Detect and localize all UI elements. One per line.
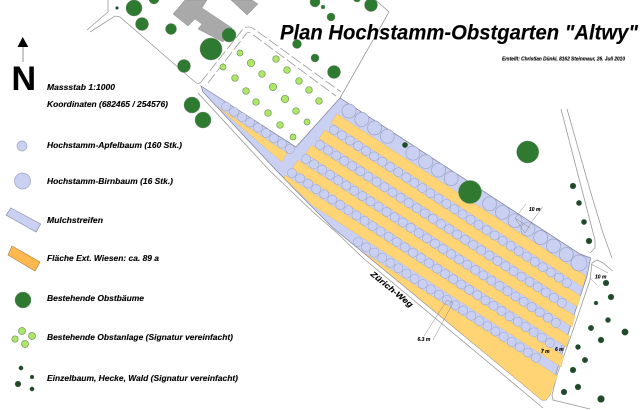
author credit: Erstellt: Christian Dünki, 8162 Steinmaur, 26. Juli 2010 xyxy=(502,56,625,62)
legend: existing fruit trees xyxy=(15,292,144,308)
legend: meadow area: Fläche Ext. Wiesen: ca. 89 a xyxy=(47,253,159,263)
legend: single tree, hedge, forest: Einzelbaum, Hecke, Wald (Signatur vereinfacht) xyxy=(47,373,238,383)
legend: single tree, hedge, forest xyxy=(15,366,238,391)
legend: mulch strip: Mulchstreifen xyxy=(47,215,103,225)
existing orchard xyxy=(220,50,322,140)
path label: Zürich-Weg xyxy=(368,269,415,309)
dimension lines and labels: 6 m xyxy=(555,347,564,353)
scale text: Massstab 1:1000 xyxy=(47,82,115,92)
legend: meadow area xyxy=(8,246,159,271)
legend: existing orchard xyxy=(12,328,233,348)
legend: existing fruit trees: Bestehende Obstbäume xyxy=(47,293,144,303)
mulch strip area xyxy=(201,86,591,400)
dimension lines and labels: 6.3 m xyxy=(418,337,431,343)
single trees, hedge, forest xyxy=(116,6,628,402)
dimension lines and labels: 7 m xyxy=(541,349,550,355)
existing fruit trees xyxy=(126,0,539,204)
dimension lines and labels xyxy=(418,204,608,355)
legend: existing orchard: Bestehende Obstanlage (Signatur vereinfacht) xyxy=(47,332,233,342)
legend: apple tree: Hochstamm-Apfelbaum (160 Stk.) xyxy=(47,140,182,150)
extensive meadow strips xyxy=(217,106,586,400)
pear tree row xyxy=(342,104,587,271)
north arrow xyxy=(12,37,36,98)
apple tree rows xyxy=(226,106,567,363)
dimension lines and labels: 10 m xyxy=(595,274,607,280)
legend: pear tree xyxy=(14,173,173,189)
legend: pear tree: Hochstamm-Birnbaum (16 Stk.) xyxy=(47,176,173,186)
coordinates text: Koordinaten (682465 / 254576) xyxy=(47,99,168,109)
north arrow: N xyxy=(12,60,36,98)
buildings xyxy=(173,0,258,42)
legend: mulch strip xyxy=(6,208,103,232)
dimension lines and labels: 10 m xyxy=(529,207,541,213)
